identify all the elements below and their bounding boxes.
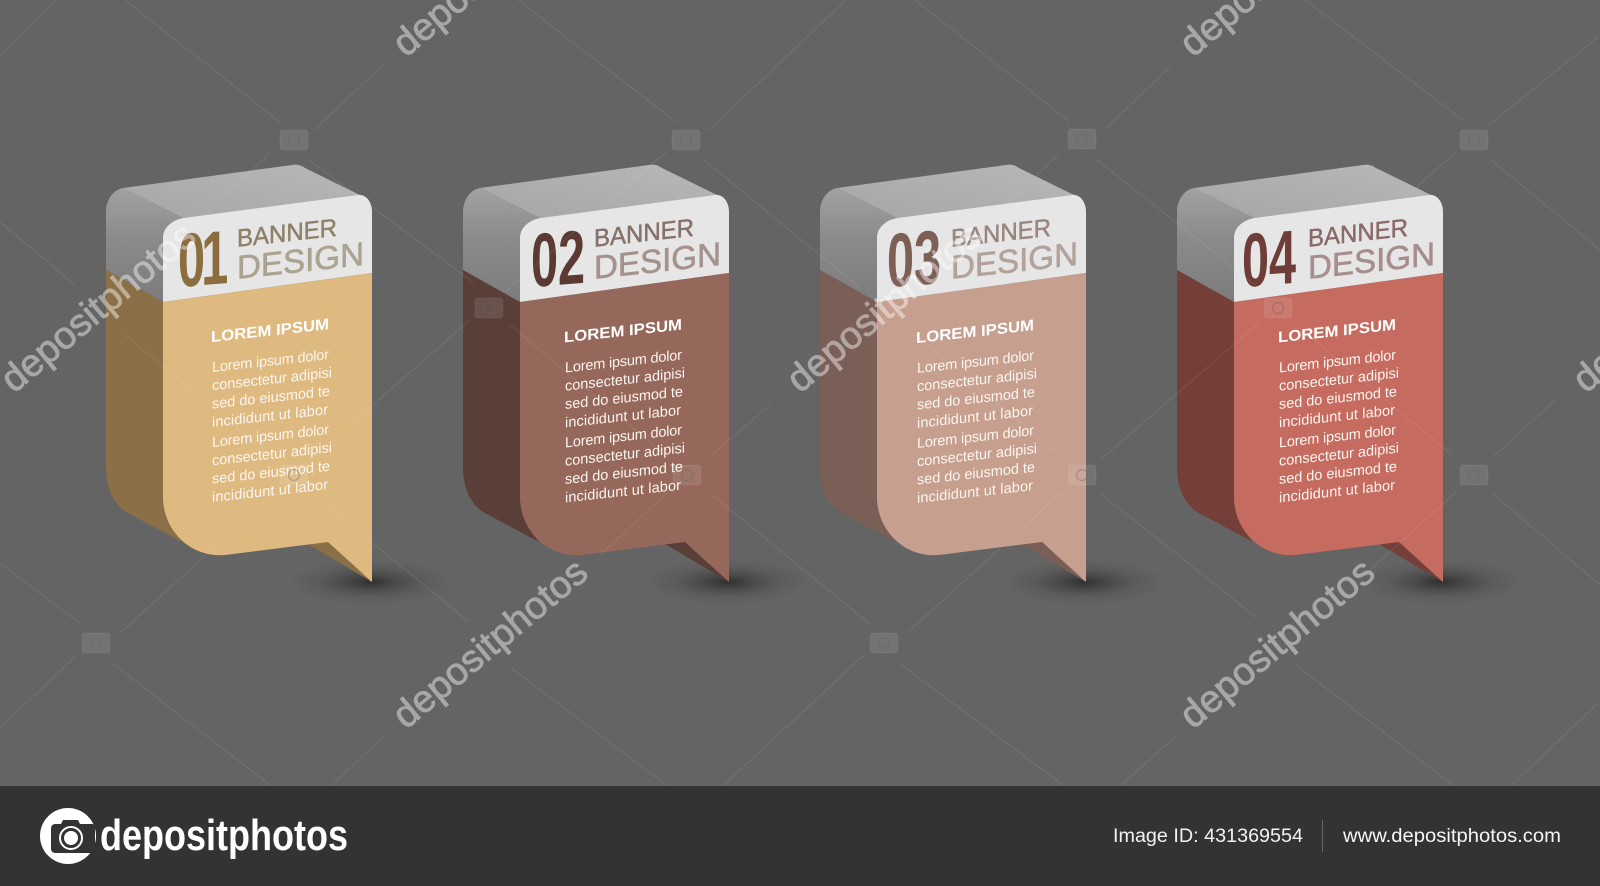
text: banner 03: consectetur adipisi: [917, 441, 1037, 470]
text: banner 01: sed do eiusmod te: [212, 384, 330, 413]
card shadow 2: [645, 559, 809, 605]
card shadow 3: [1002, 559, 1166, 605]
watermark: camera icons: [82, 129, 1488, 653]
number 02: 02: [531, 214, 585, 304]
text: banner 01: BANNER: [237, 214, 337, 253]
text: banner 03: LOREM IPSUM: [916, 317, 1034, 347]
text: banner 04: consectetur adipisi: [1279, 366, 1399, 395]
panel: banner 02: [463, 165, 729, 582]
text: banner 04: sed do eiusmod te: [1279, 384, 1397, 413]
text: banner 01: [211, 211, 364, 506]
text: banner 03: DESIGN: [951, 236, 1078, 287]
card shadow 4: [1359, 559, 1523, 605]
text: banner 04: sed do eiusmod te: [1279, 459, 1397, 488]
watermark: diagonal depositphotos text: depositphotos: [385, 551, 596, 737]
image id: Image ID: 431369554: [1113, 826, 1303, 847]
text: banner 04: LOREM IPSUM: [1278, 317, 1396, 347]
text: banner 04: DESIGN: [1308, 236, 1435, 287]
text: banner 02: incididunt ut labor: [565, 403, 681, 431]
text: banner 03: BANNER: [951, 214, 1051, 253]
text: banner 01: Lorem ipsum dolor: [212, 422, 329, 451]
panel: banner 03: [820, 165, 1086, 582]
text: banner 02: LOREM IPSUM: [564, 317, 682, 347]
website url: www.depositphotos.com: [1342, 826, 1561, 847]
text: banner 02: Lorem ipsum dolor: [565, 348, 682, 376]
panel: banner 01: [106, 165, 372, 582]
footer bar: [0, 786, 1600, 886]
text: banner 04: incididunt ut labor: [1279, 478, 1395, 506]
text: banner 03: Lorem ipsum dolor: [917, 423, 1034, 452]
text: banner 02: sed do eiusmod te: [565, 384, 683, 413]
text: banner 04: Lorem ipsum dolor: [1279, 423, 1396, 451]
number 03: 03: [887, 214, 941, 304]
icon: camera logo: [40, 808, 96, 864]
text: banner 02: consectetur adipisi: [565, 441, 685, 470]
number 04: 04: [1242, 214, 1296, 304]
text: banner 03: consectetur adipisi: [917, 366, 1037, 395]
text: banner 01: incididunt ut labor: [212, 402, 328, 431]
text: banner 03: sed do eiusmod te: [917, 385, 1035, 414]
text: banner 02: DESIGN: [594, 236, 721, 287]
text: banner 03: incididunt ut labor: [917, 478, 1033, 507]
text: banner 01: LOREM IPSUM: [211, 316, 329, 346]
text: banner 03: incididunt ut labor: [917, 403, 1033, 432]
number 01: 01: [178, 214, 228, 304]
text: banner 03: sed do eiusmod te: [917, 460, 1035, 489]
text: banner 04: incididunt ut labor: [1279, 403, 1395, 431]
text: banner 04: Lorem ipsum dolor: [1279, 348, 1396, 376]
text: banner 01: incididunt ut labor: [212, 477, 328, 506]
text: banner 02: [564, 211, 721, 507]
watermark: diagonal depositphotos text: depositphotos: [1172, 551, 1383, 737]
text: banner 04: consectetur adipisi: [1279, 441, 1399, 470]
panel: banner 04: [1177, 165, 1443, 582]
text: banner 01: sed do eiusmod te: [212, 459, 330, 488]
text: banner 03: Lorem ipsum dolor: [917, 348, 1034, 377]
text: banner 02: Lorem ipsum dolor: [565, 423, 682, 451]
text: banner 04: [1278, 211, 1435, 507]
text: banner 01: consectetur adipisi: [212, 365, 332, 394]
text: banner 02: consectetur adipisi: [565, 366, 685, 395]
text: banner 02: incididunt ut labor: [565, 478, 681, 506]
card shadow 1: [288, 559, 452, 605]
logo wordmark: depositphotos: [100, 811, 348, 860]
text: banner 01: consectetur adipisi: [212, 440, 332, 469]
text: banner 01: Lorem ipsum dolor: [212, 347, 329, 376]
text: banner 01: DESIGN: [237, 236, 364, 287]
text: banner 02: BANNER: [594, 214, 694, 253]
text: banner 04: BANNER: [1308, 214, 1408, 253]
text: banner 03: [916, 211, 1078, 507]
text: banner 02: sed do eiusmod te: [565, 459, 683, 488]
watermark: diagonal depositphotos text: depositphotos: [779, 215, 990, 401]
